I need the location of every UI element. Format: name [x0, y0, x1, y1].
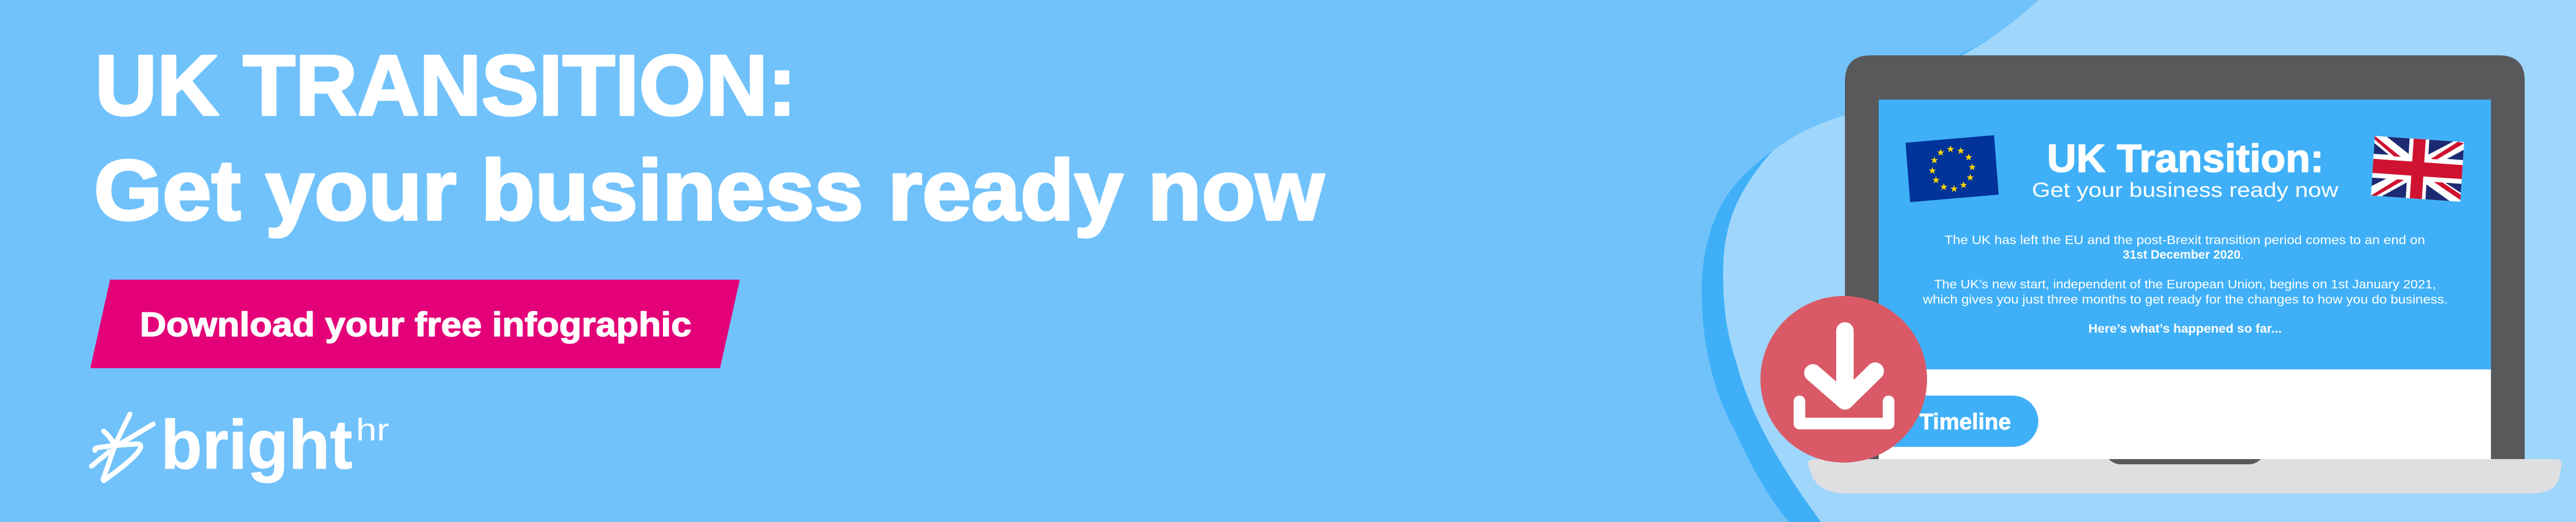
- icon: logo star: [91, 414, 153, 481]
- screen body text: 31st December 2020.: [2123, 248, 2244, 262]
- laptop notch: [2109, 459, 2261, 464]
- laptop screen white area: [1879, 369, 2491, 459]
- screen body text: The UK has left the EU and the post-Brexit transition period comes to an end on: [1945, 234, 2425, 247]
- button: download your free infographic: [90, 280, 740, 368]
- title: UK TRANSITION:: [95, 38, 796, 133]
- screen body text: [1922, 234, 2448, 336]
- icon: EU flag: [1905, 135, 1999, 202]
- icon: UK flag: [2371, 136, 2464, 202]
- laptop screen blue header: [1879, 100, 2491, 369]
- screen heading: [2032, 136, 2339, 202]
- icon: download arrow: [1799, 331, 1889, 424]
- laptop base: [1808, 459, 2561, 493]
- screen body text: which gives you just three months to get ready for the changes to how you do business.: [1922, 293, 2448, 306]
- logo: brighthr: [91, 406, 389, 484]
- laptop lid: [1845, 55, 2525, 466]
- title: Get your business ready now: [94, 143, 1325, 238]
- laptop: [1808, 55, 2561, 493]
- download icon: [1760, 296, 1927, 463]
- screen body text: Here’s what’s happened so far...: [2088, 322, 2282, 336]
- logo superscript: hr: [356, 412, 389, 447]
- timeline pill: Timeline: [1919, 410, 2011, 435]
- screen heading: UK Transition:: [2047, 136, 2324, 181]
- screen body text: The UK’s new start, independent of the European Union, begins on 1st January 2021,: [1934, 278, 2436, 291]
- title: [94, 38, 1325, 238]
- button: download your free infographic: Download your free infographic: [140, 306, 691, 344]
- timeline pill: [1864, 396, 2038, 447]
- background shape: light blue wave: [1723, 0, 2576, 522]
- screen heading: Get your business ready now: [2032, 179, 2339, 202]
- logo wordmark: bright: [161, 406, 352, 484]
- background shape: dark blue crescent: [1702, 0, 2039, 522]
